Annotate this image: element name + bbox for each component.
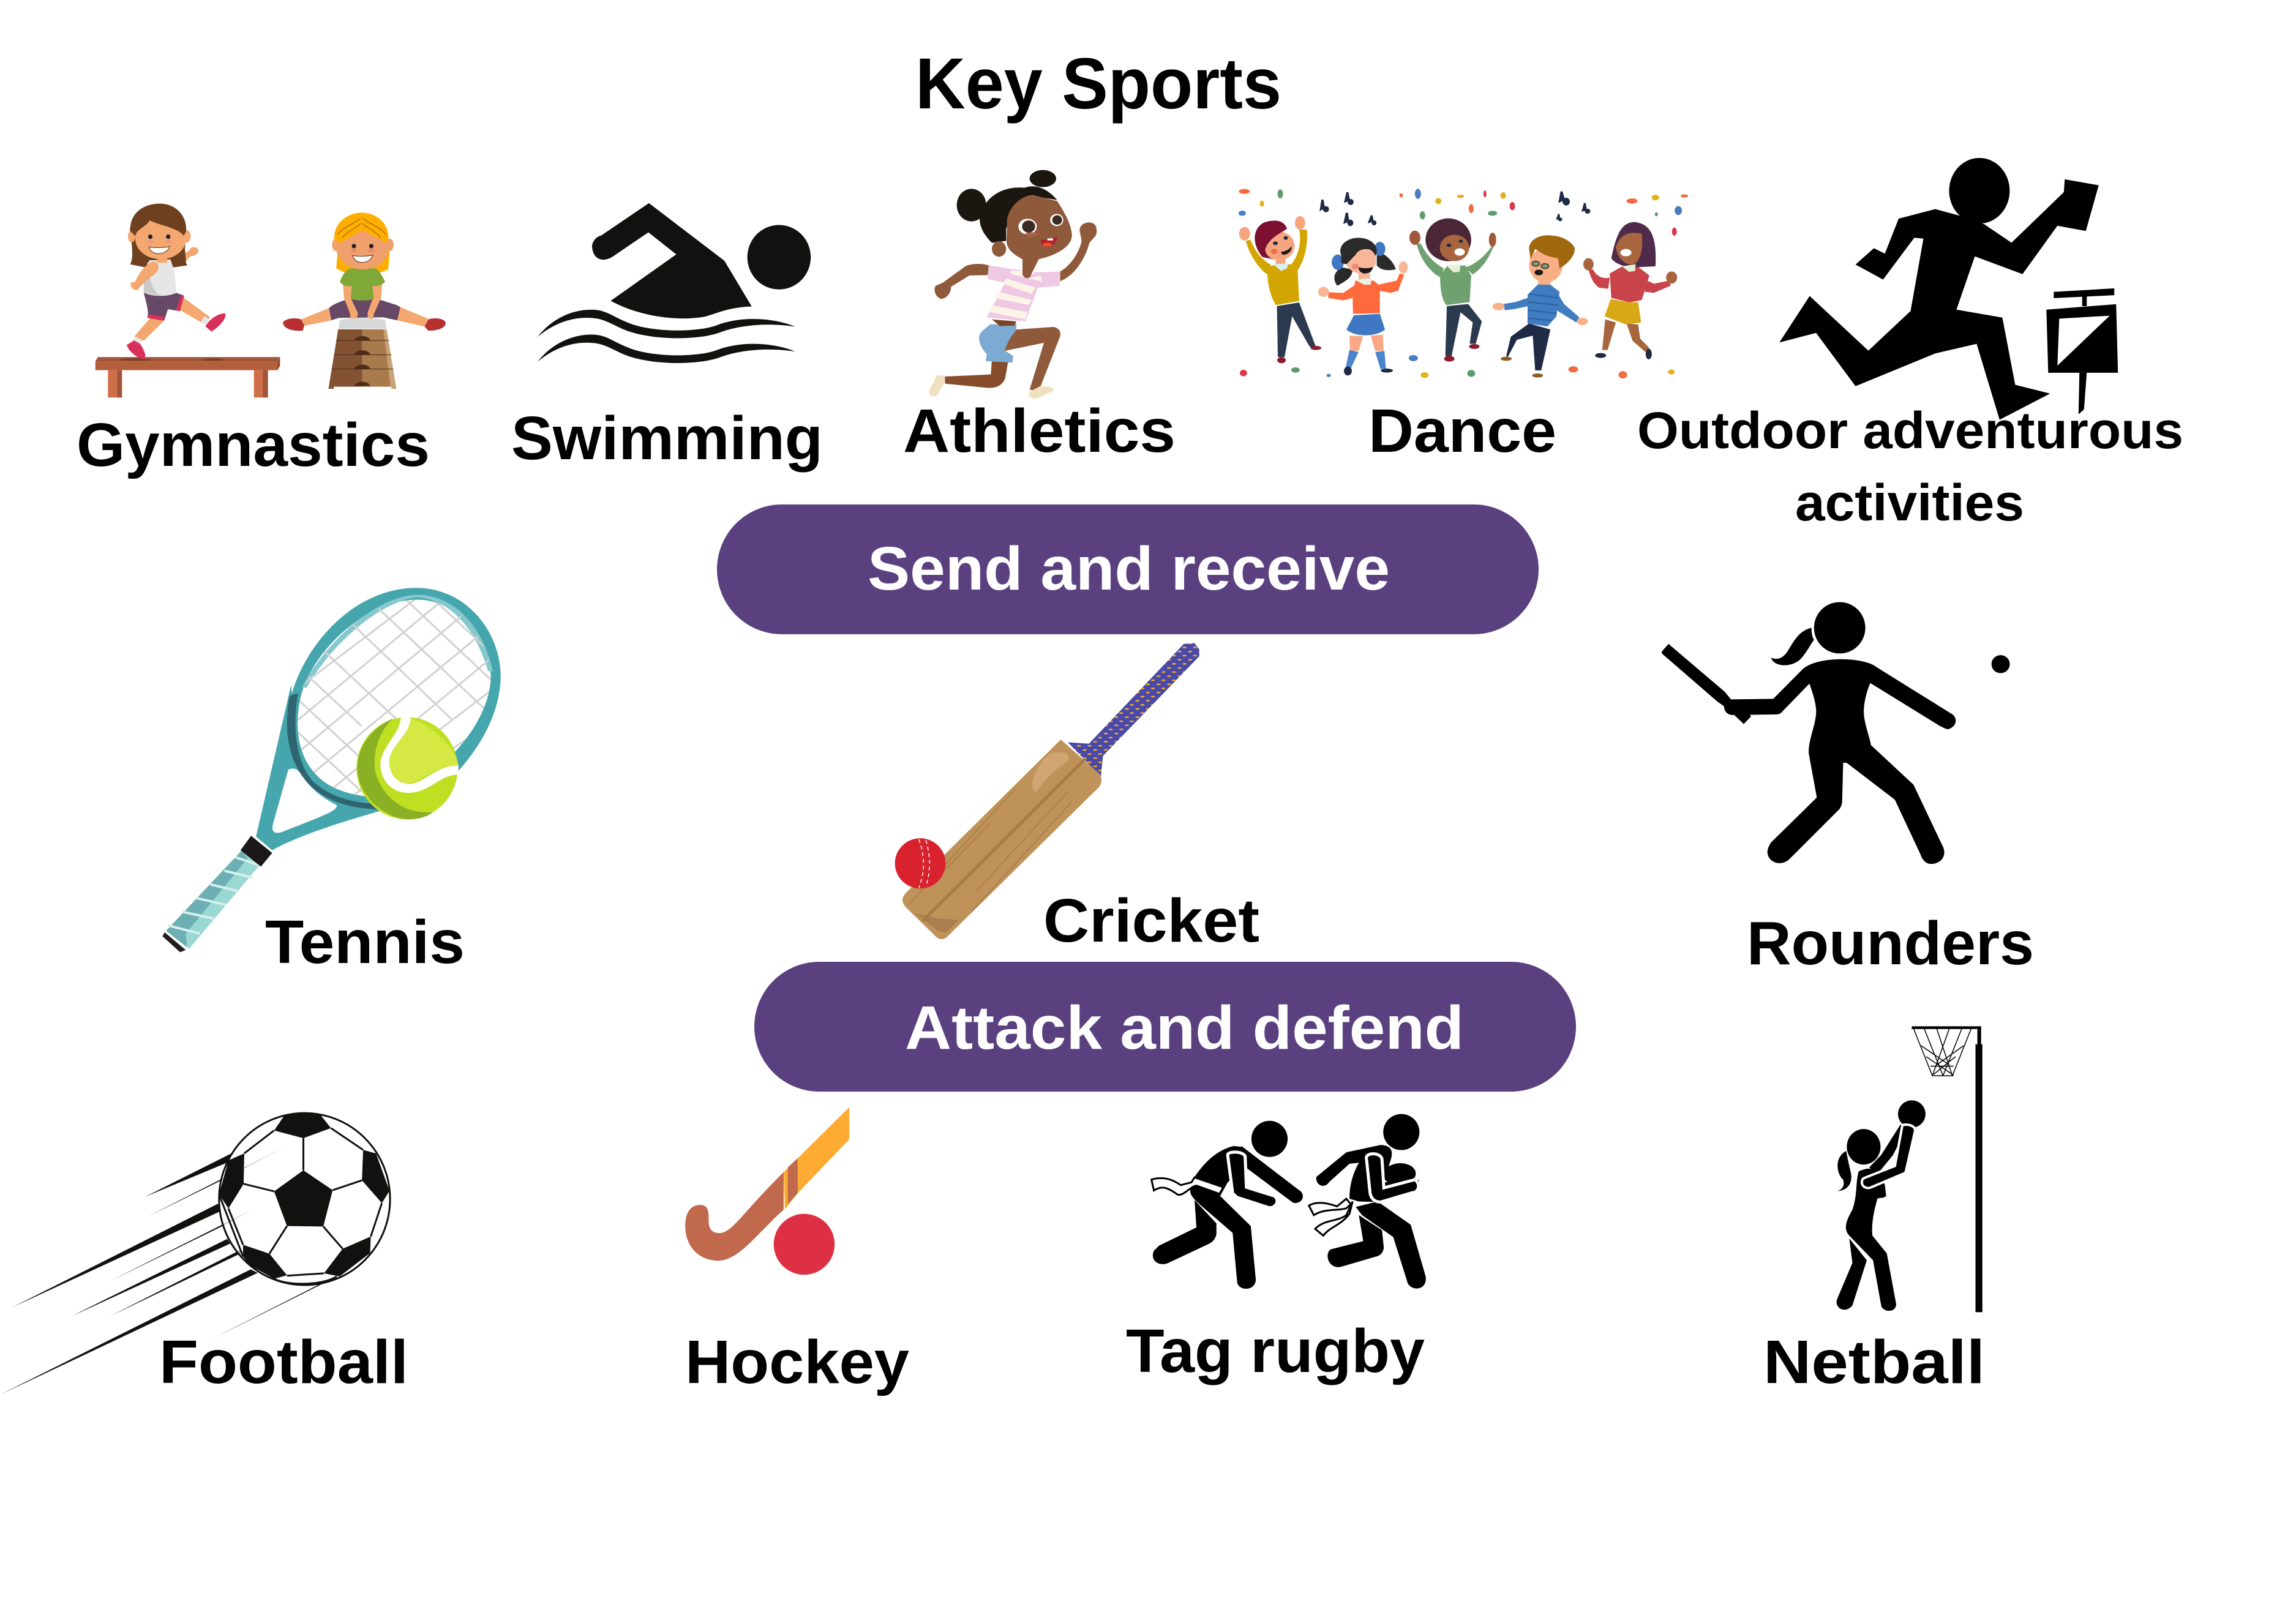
vault box [328,318,396,389]
shoes [929,375,945,397]
racket frame [256,588,501,850]
hair [957,170,1057,243]
label: football: Football [159,1328,408,1396]
banner: send and receive [717,504,1539,634]
arms [934,264,989,299]
tagger figure [1152,1121,1303,1289]
icon: rounders batter [1662,602,2009,864]
infographic canvas [1,58,2181,1396]
shirt [987,265,1060,326]
post and net [1911,1026,1983,1312]
tennis ball [356,717,459,819]
banner: attack and defend [754,962,1576,1092]
girl on vault [283,212,446,331]
label: cricket: Cricket [1043,886,1259,955]
label: tag rugby: Tag rugby [1126,1317,1425,1385]
icon: tag rugby players [1152,1114,1426,1289]
label: outdoor adventurous activities: activities [1795,474,2024,531]
icon: hockey stick and ball [685,1108,849,1275]
back leg [945,360,1008,388]
icon: gymnastics children [96,204,446,397]
label: outdoor adventurous activities [1637,402,2183,531]
label: tennis: Tennis [265,908,465,976]
racket grip [162,836,272,952]
icon: netball player and post [1837,1026,1983,1312]
bat blade [902,740,1101,939]
child in blue [1493,235,1588,378]
ball [1898,1100,1926,1128]
child in red [1583,222,1677,359]
icon: football with speed lines [0,1113,390,1395]
icon: tennis racket and ball [162,588,502,952]
cricket ball [895,838,945,888]
banner: attack and defend: Attack and defend [905,994,1464,1062]
label: hockey: Hockey [685,1328,909,1396]
bat handle [1068,643,1199,776]
front leg [1004,327,1060,391]
icon: orienteering runner and map post [1779,158,2118,420]
label: outdoor adventurous activities: Outdoor adventurous [1637,402,2183,459]
racket strings [298,600,491,795]
title: Key Sports [915,43,1281,124]
label: athletics: Athletics [903,397,1176,465]
child in green [1409,219,1496,362]
speed lines [0,1145,335,1395]
icon: swimmer [538,203,811,363]
label: netball: Netball [1763,1328,1985,1396]
label: gymnastics: Gymnastics [77,411,430,479]
girl on bench [127,204,225,359]
label: dance: Dance [1368,397,1556,465]
runner figure [1309,1114,1426,1289]
confetti and notes [1239,189,1688,378]
label: swimming: Swimming [511,404,823,473]
bench [96,357,280,397]
icon: cricket bat and ball [895,643,1199,939]
label: rounders: Rounders [1747,909,2034,978]
child in orange [1318,238,1408,375]
icon: athletics girl [929,170,1097,399]
player [1837,1125,1915,1311]
ball [219,1113,390,1285]
child in yellow [1239,216,1321,363]
banner: send and receive: Send and receive [868,534,1390,603]
shorts [979,323,1016,362]
icon: dancing children with confetti [1239,189,1688,378]
head [992,195,1072,278]
